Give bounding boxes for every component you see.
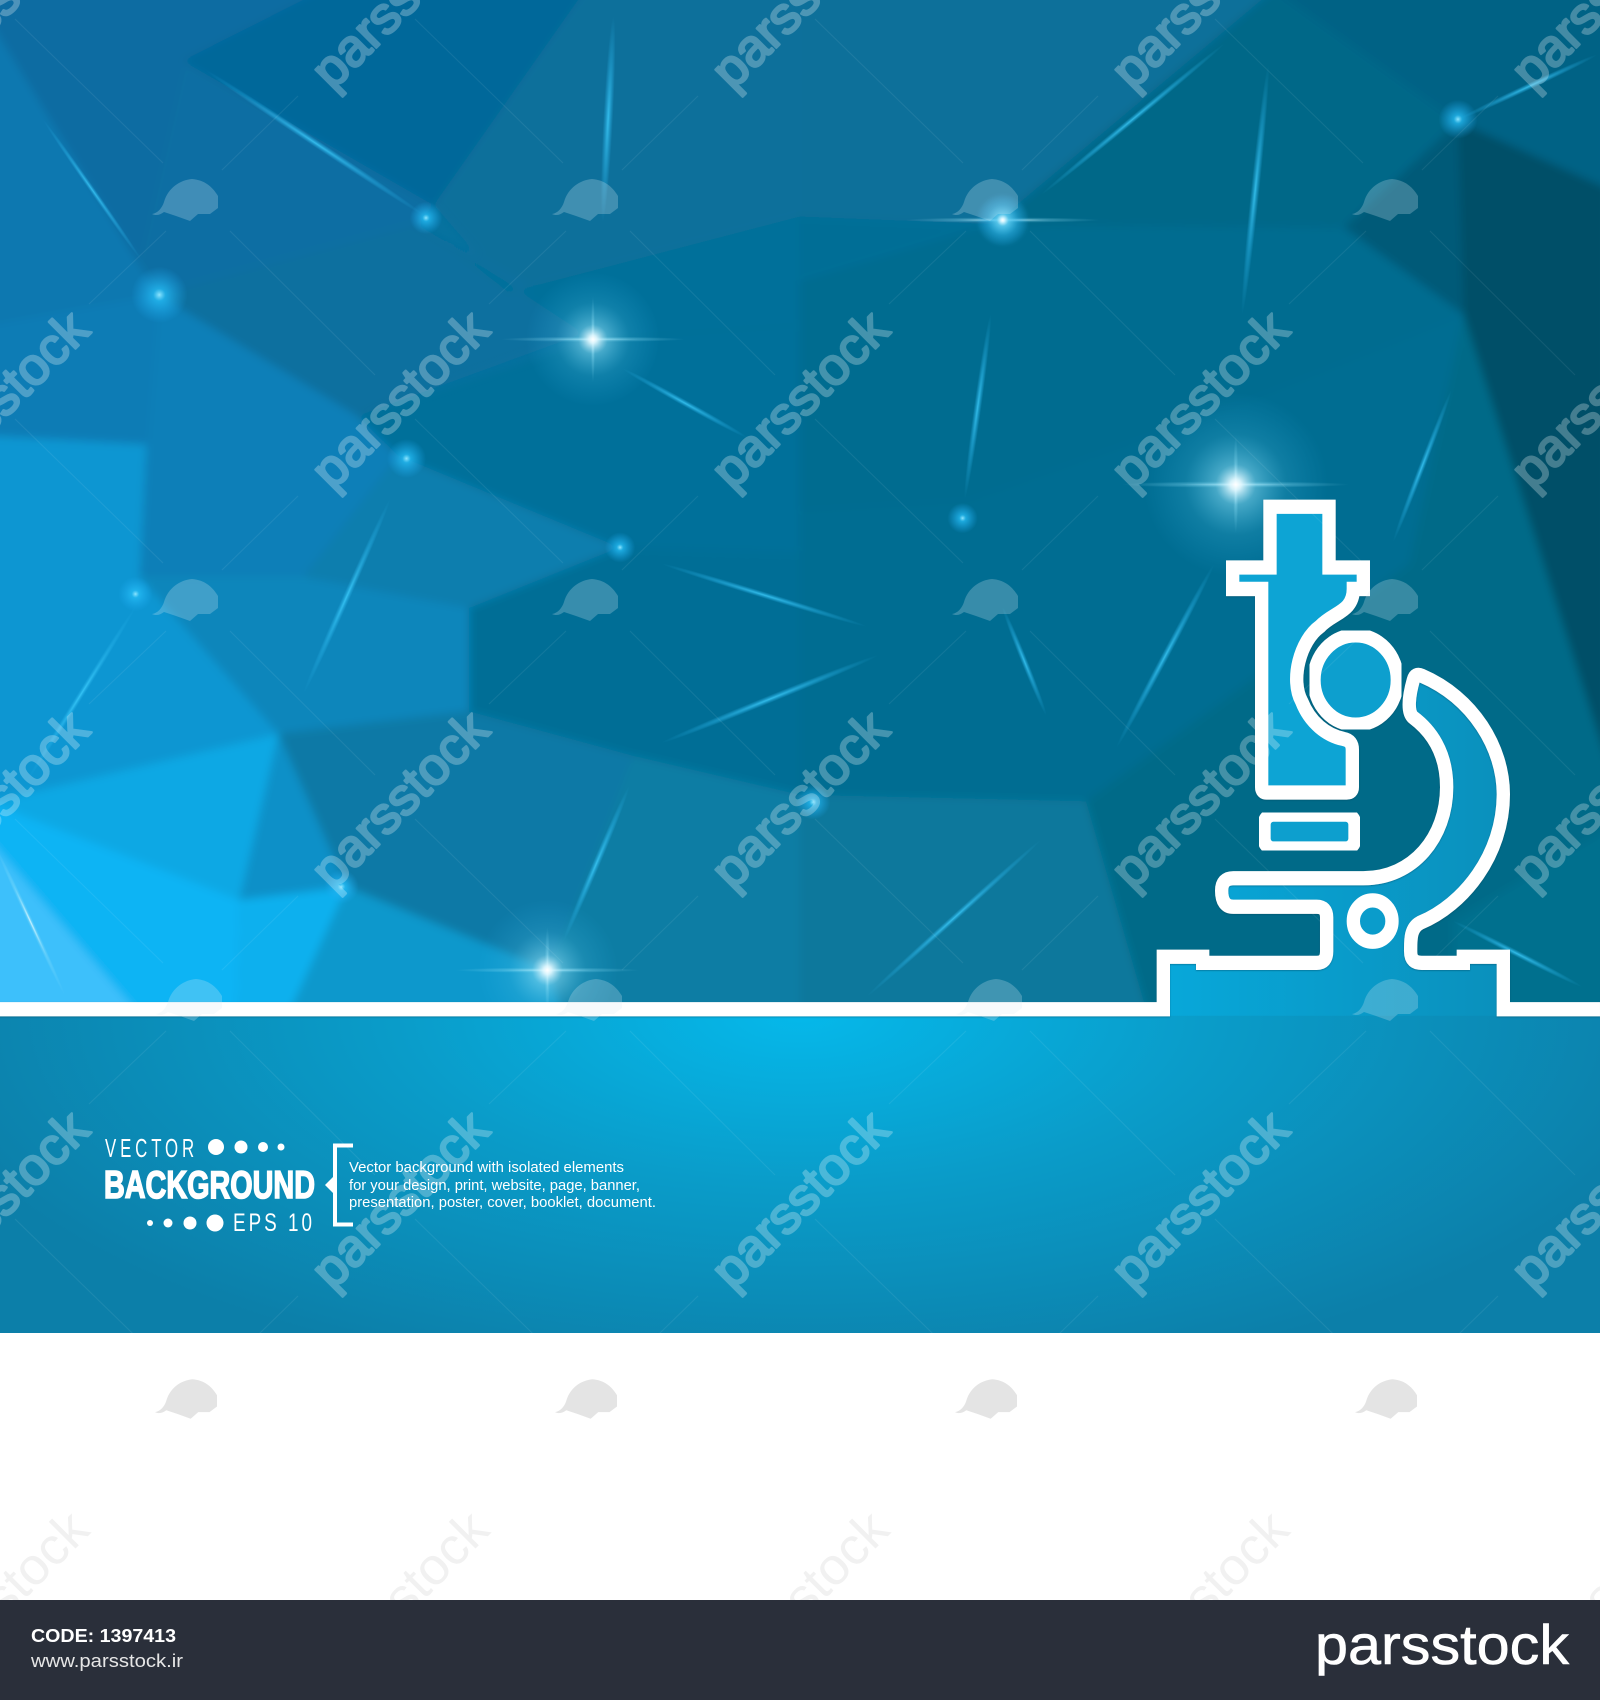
watermark text on white: parsstock [1100, 1499, 1301, 1700]
watermark bull icons [152, 179, 1418, 1021]
lens circle [1314, 635, 1397, 725]
description text: for your design, print, website, page, banner, [349, 1178, 640, 1194]
badge: vector background [104, 1133, 656, 1237]
star flares [455, 217, 1350, 1014]
watermark text grid: parsstock [300, 1099, 501, 1300]
description text: Vector background with isolated elements [349, 1160, 624, 1176]
arm and base fill [1163, 675, 1503, 1016]
watermark text grid: parsstock [700, 1099, 901, 1300]
watermark text on white [0, 1499, 1600, 1700]
polygon facets [0, 0, 1600, 1019]
watermark text grid: parsstock [700, 299, 901, 500]
slide stage [1264, 815, 1355, 849]
watermark text grid: parsstock [1100, 699, 1301, 900]
label EPS 10: EPS 10 [233, 1209, 315, 1237]
site url: www.parsstock.ir [30, 1651, 183, 1671]
description text: presentation, poster, cover, booklet, document. [349, 1195, 656, 1211]
dots bottom [147, 1214, 224, 1232]
watermark text on white: parsstock [300, 1499, 501, 1700]
label BACKGROUND: BACKGROUND [104, 1164, 315, 1207]
dots top [208, 1139, 284, 1155]
pointer [325, 1177, 333, 1193]
star glows [118, 100, 1477, 1041]
description text [349, 1160, 656, 1211]
background: polygonal blue panel [0, 0, 1600, 1041]
label VECTOR: VECTOR [105, 1133, 198, 1163]
watermark text grid [0, 0, 1600, 1300]
watermark text grid: parsstock [300, 299, 501, 500]
watermark text on white: parsstock [700, 1499, 901, 1700]
footer bar [0, 1600, 1600, 1700]
light streaks [0, 16, 1599, 999]
bracket [335, 1146, 353, 1224]
watermark text grid: parsstock [1100, 299, 1301, 500]
watermark text grid: parsstock [700, 699, 901, 900]
microscope body [1233, 507, 1363, 792]
code label: CODE: 1397413 [31, 1626, 176, 1646]
footer logo: parsstock [1315, 1613, 1570, 1676]
watermark text grid: parsstock [300, 699, 501, 900]
band: lower blue panel [0, 1009, 1600, 1333]
watermark bull icons on white [155, 1379, 1417, 1419]
knob circle [1353, 900, 1392, 942]
microscope icon with baseline rule [0, 507, 1600, 1016]
watermark text grid: parsstock [1100, 1099, 1301, 1300]
outline rule [0, 675, 1600, 1009]
